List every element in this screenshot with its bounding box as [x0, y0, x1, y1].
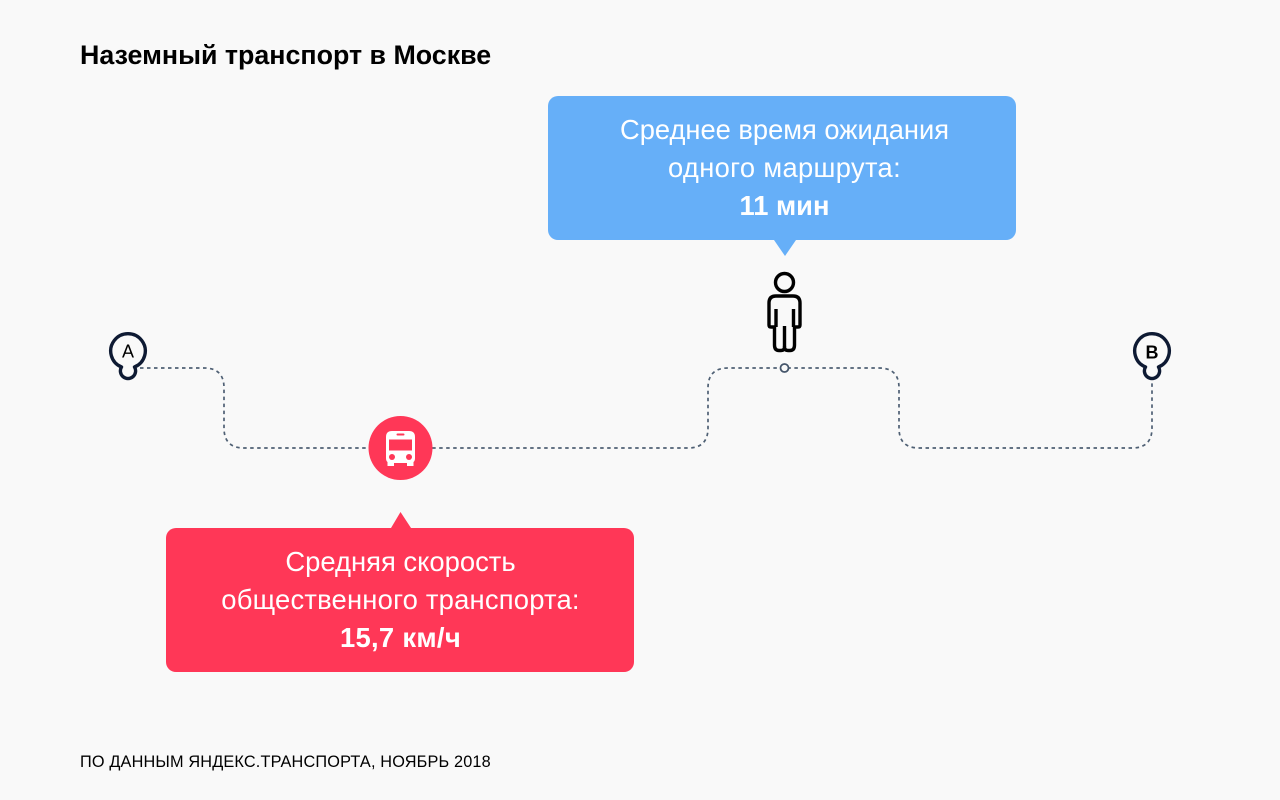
icon: pin A: A [122, 342, 134, 362]
icon: pin B [1135, 334, 1169, 379]
panel: waiting time callout: Среднее время ожидания [620, 114, 949, 145]
panel: average speed callout [166, 528, 634, 672]
panel: waiting time callout [548, 96, 1016, 240]
panel: average speed callout: 15,7 км/ч [340, 622, 461, 653]
panel: waiting time callout: одного маршрута: [668, 152, 901, 183]
icon: stop marker [780, 364, 788, 372]
arrow: red callout pointer [391, 512, 411, 528]
panel: average speed callout: общественного транспорта: [221, 584, 580, 615]
icon: pin B: B [1146, 342, 1158, 362]
title: Наземный транспорт в Москве [80, 40, 491, 70]
panel: average speed callout: Средняя скорость [285, 546, 516, 577]
route line [140, 368, 1152, 448]
icon: bus [368, 416, 432, 480]
icon: person [769, 274, 800, 350]
panel: waiting time callout: 11 мин [740, 190, 829, 221]
icon: pin A [111, 334, 145, 379]
source note: ПО ДАННЫМ ЯНДЕКС.ТРАНСПОРТА, НОЯБРЬ 2018 [80, 753, 491, 771]
arrow: blue callout pointer [774, 240, 796, 256]
